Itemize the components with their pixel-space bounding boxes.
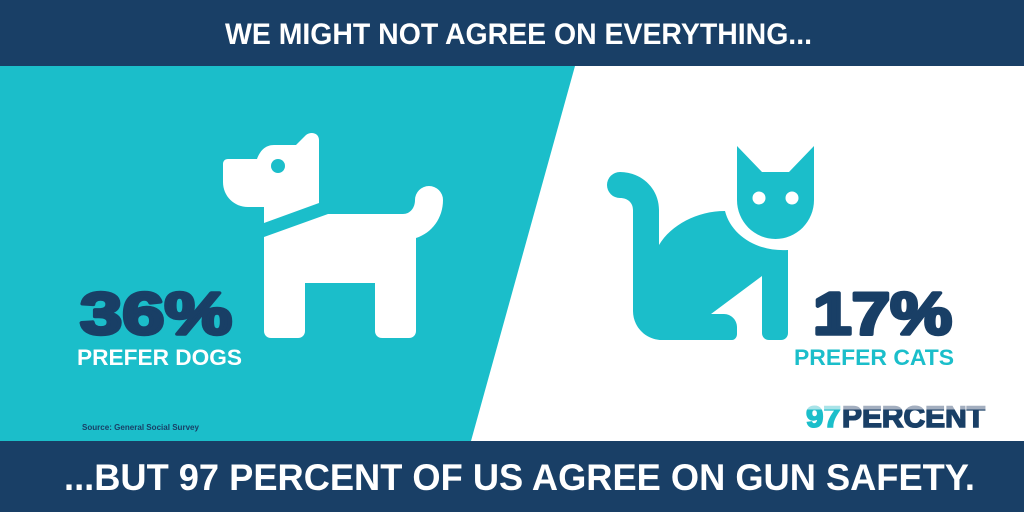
bottom banner: ...BUT 97 PERCENT OF US AGREE ON GUN SAFETY. (64, 457, 975, 498)
stat: 17% prefer cats (794, 281, 954, 370)
stat: 36% prefer dogs: 36% (80, 281, 232, 347)
panel: teal diagonal (0, 66, 575, 441)
top banner: WE MIGHT NOT AGREE ON EVERYTHING... (225, 18, 812, 51)
logo: 97 percent: PERCENT (842, 401, 985, 434)
source note: Source: General Social Survey (82, 423, 200, 432)
stat: 36% prefer dogs: PREFER DOGS (77, 345, 242, 370)
stat: 17% prefer cats: PREFER CATS (794, 345, 954, 370)
stat: 17% prefer cats: 17% (813, 281, 952, 347)
top banner (0, 0, 1024, 66)
bottom banner (0, 441, 1024, 512)
icon: cat (607, 146, 814, 340)
stat: 36% prefer dogs (77, 281, 242, 370)
logo: 97 percent: 97 (806, 401, 841, 434)
icon: dog (223, 133, 443, 338)
